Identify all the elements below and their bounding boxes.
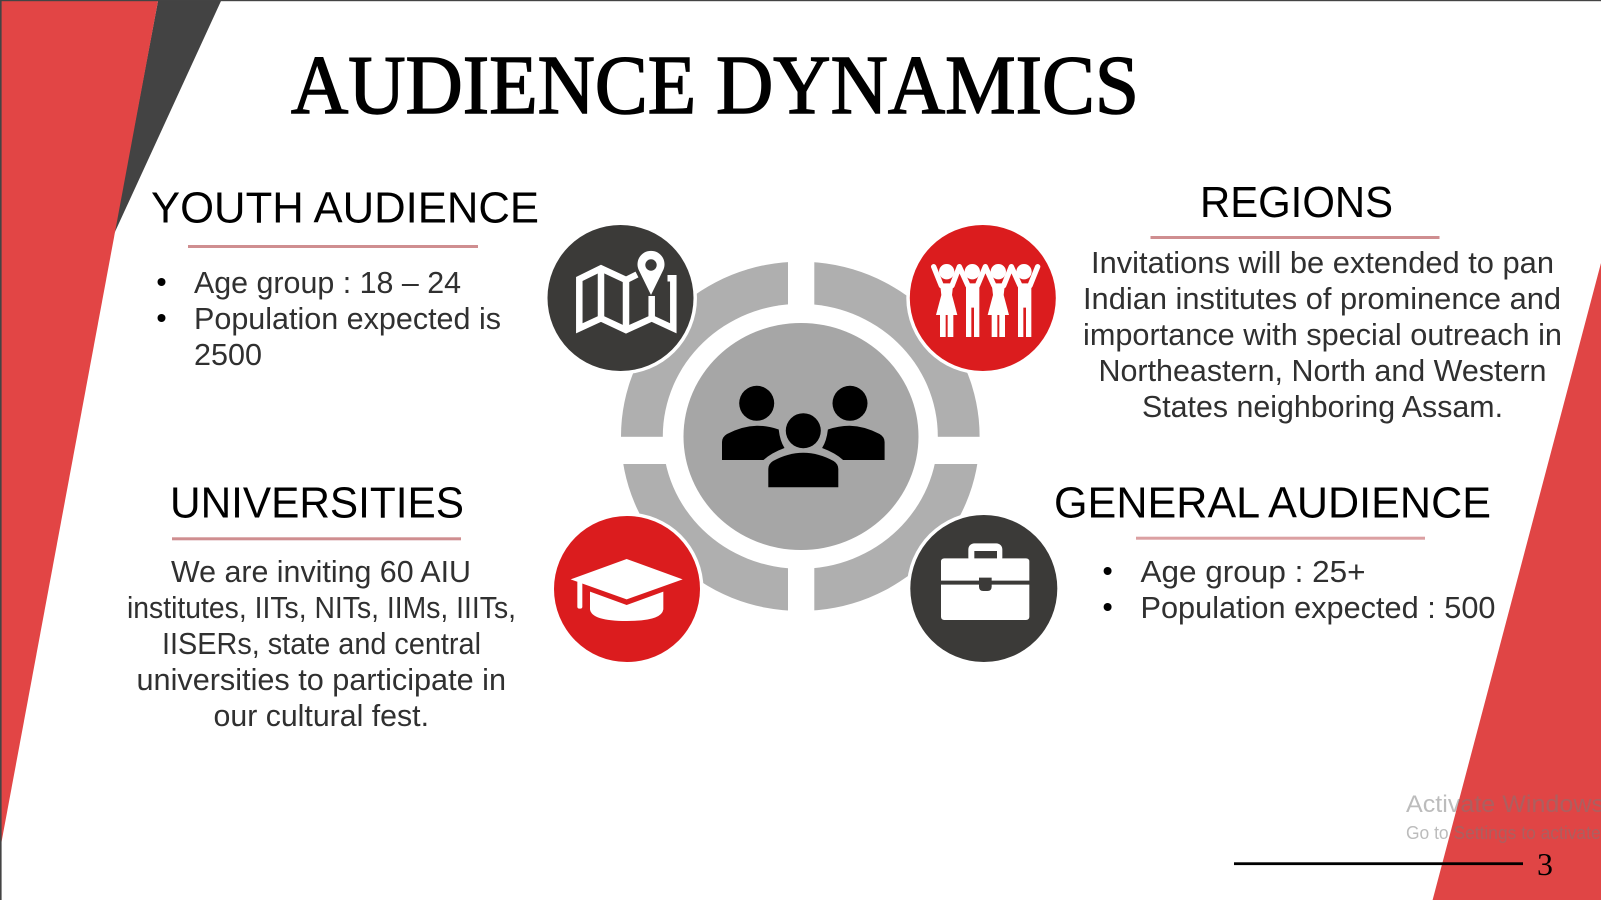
heading underline (1150, 236, 1440, 239)
bullet list: 2500 (194, 337, 262, 372)
bullet list (1104, 554, 1496, 625)
panel: universities (127, 478, 516, 733)
heading: general audience: GENERAL AUDIENCE (1054, 478, 1491, 528)
watermark: activate windows (1406, 791, 1601, 843)
icon circle: graduation cap (550, 512, 704, 666)
heading: regions: REGIONS (1200, 178, 1393, 227)
paragraph: regions: Indian institutes of prominence and (1083, 281, 1561, 316)
bullet list: Population expected is (194, 301, 501, 336)
paragraph: regions (1083, 245, 1562, 424)
icon circle: map with pin (544, 222, 697, 374)
paragraph: universities (127, 554, 516, 733)
background: dark wedge top left (114, 1, 221, 234)
panel: youth audience (151, 184, 539, 372)
bullet list (158, 265, 501, 372)
paragraph: regions: Northeastern, North and Western (1098, 353, 1546, 388)
panel: general audience (1054, 478, 1496, 625)
heading underline (172, 537, 461, 540)
paragraph: universities: universities to participate in (136, 662, 506, 697)
central grey disc (684, 323, 918, 550)
paragraph: universities: our cultural fest. (214, 698, 429, 733)
paragraph: regions: Invitations will be extended to pan (1091, 245, 1554, 280)
page number: 3 (1537, 846, 1553, 882)
segmented ring (615, 255, 986, 617)
icon: audience group (722, 386, 885, 487)
paragraph: universities: We are inviting 60 AIU (171, 554, 471, 589)
paragraph: universities: institutes, IITs, NITs, IIMs, IIITs, (127, 590, 516, 625)
diagram: central hub with four icon circles (544, 222, 1061, 666)
paragraph: universities: IISERs, state and central (162, 626, 481, 661)
icon circle: briefcase (907, 512, 1061, 666)
footer rule (1234, 862, 1523, 865)
paragraph: regions: States neighboring Assam. (1142, 389, 1503, 424)
background: red wedge left (2, 1, 158, 842)
bullet list: Age group : 18 – 24 (194, 265, 461, 300)
icon circle: people raising hands (906, 222, 1059, 374)
heading: youth audience: YOUTH AUDIENCE (151, 184, 539, 232)
heading: universities: UNIVERSITIES (170, 478, 464, 528)
bullet list: Population expected : 500 (1140, 590, 1496, 625)
paragraph: regions: importance with special outreach in (1083, 317, 1562, 352)
bullet list: Age group : 25+ (1140, 554, 1366, 589)
heading underline (188, 245, 478, 248)
title: AUDIENCE DYNAMICS (291, 39, 1139, 132)
background: red wedge right (1433, 263, 1601, 900)
watermark: activate windows: Activate Windows (1406, 791, 1601, 818)
panel: regions (1083, 178, 1562, 424)
heading underline (1136, 537, 1425, 540)
